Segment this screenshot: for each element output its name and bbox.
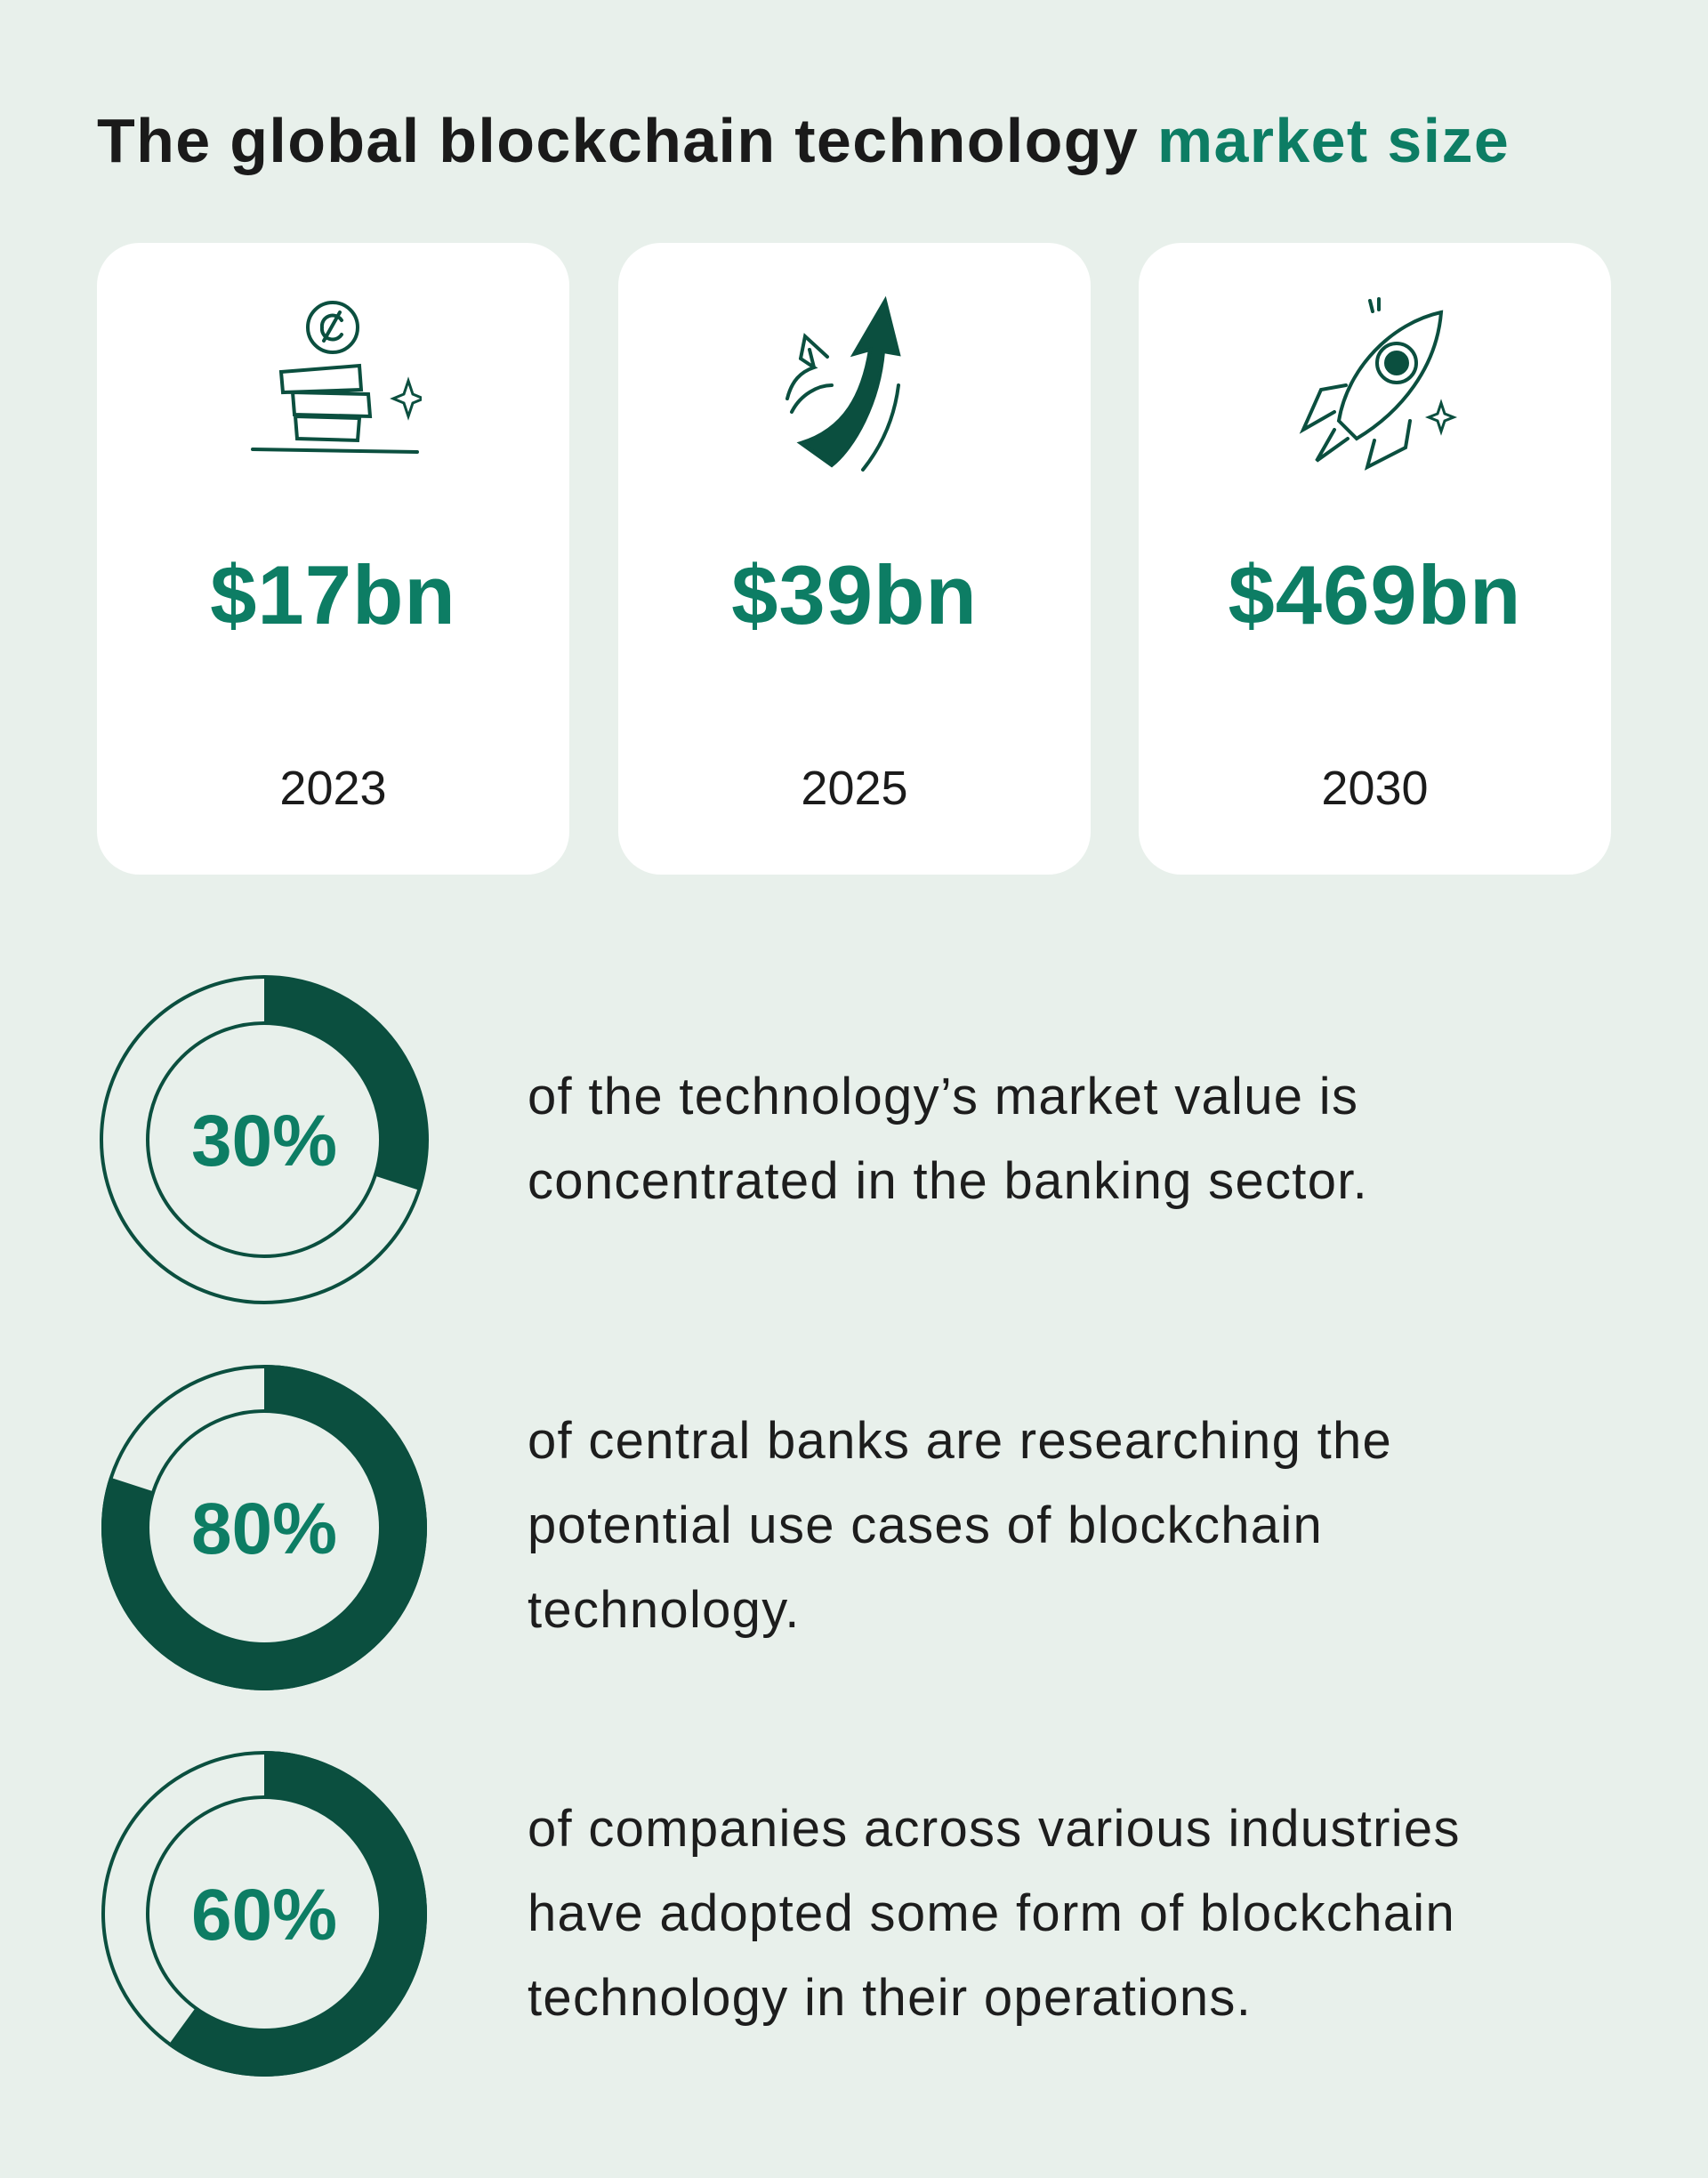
stat text 2 xyxy=(528,1412,1392,1639)
value: $469bn xyxy=(1229,548,1521,641)
stat text 2: of central banks are researching the xyxy=(528,1412,1392,1470)
donut: 60% xyxy=(101,1751,427,2077)
value: $39bn xyxy=(731,548,978,641)
card: 2023 xyxy=(97,243,569,875)
title: The global blockchain technology market size xyxy=(97,106,1510,175)
label: 80%: 80% xyxy=(191,1488,337,1569)
donut: 30% xyxy=(100,975,429,1304)
year: 2030 xyxy=(1321,762,1429,815)
stat text 3: technology in their operations. xyxy=(528,1969,1252,2027)
donut: 80% xyxy=(101,1365,427,1690)
year: 2025 xyxy=(801,762,908,815)
year: 2023 xyxy=(279,762,387,815)
label: 30%: 30% xyxy=(191,1101,337,1182)
value: $17bn xyxy=(210,548,456,641)
stat text 3: have adopted some form of blockchain xyxy=(528,1884,1455,1942)
stat text 3: of companies across various industries xyxy=(528,1800,1461,1858)
stat text 1: concentrated in the banking sector. xyxy=(528,1152,1368,1210)
icon: coins stack xyxy=(251,301,422,454)
card: 2030 xyxy=(1139,243,1611,875)
stat text 1 xyxy=(528,1068,1368,1210)
stat text 2: potential use cases of blockchain xyxy=(528,1496,1323,1554)
stat text 3 xyxy=(528,1800,1461,2027)
stat text 2: technology. xyxy=(528,1581,801,1639)
label: 60%: 60% xyxy=(191,1875,337,1956)
stat text 1: of the technology’s market value is xyxy=(528,1068,1358,1125)
icon: rocket xyxy=(1299,297,1457,471)
card: 2025 xyxy=(618,243,1091,875)
icon: arrow up xyxy=(785,296,901,472)
